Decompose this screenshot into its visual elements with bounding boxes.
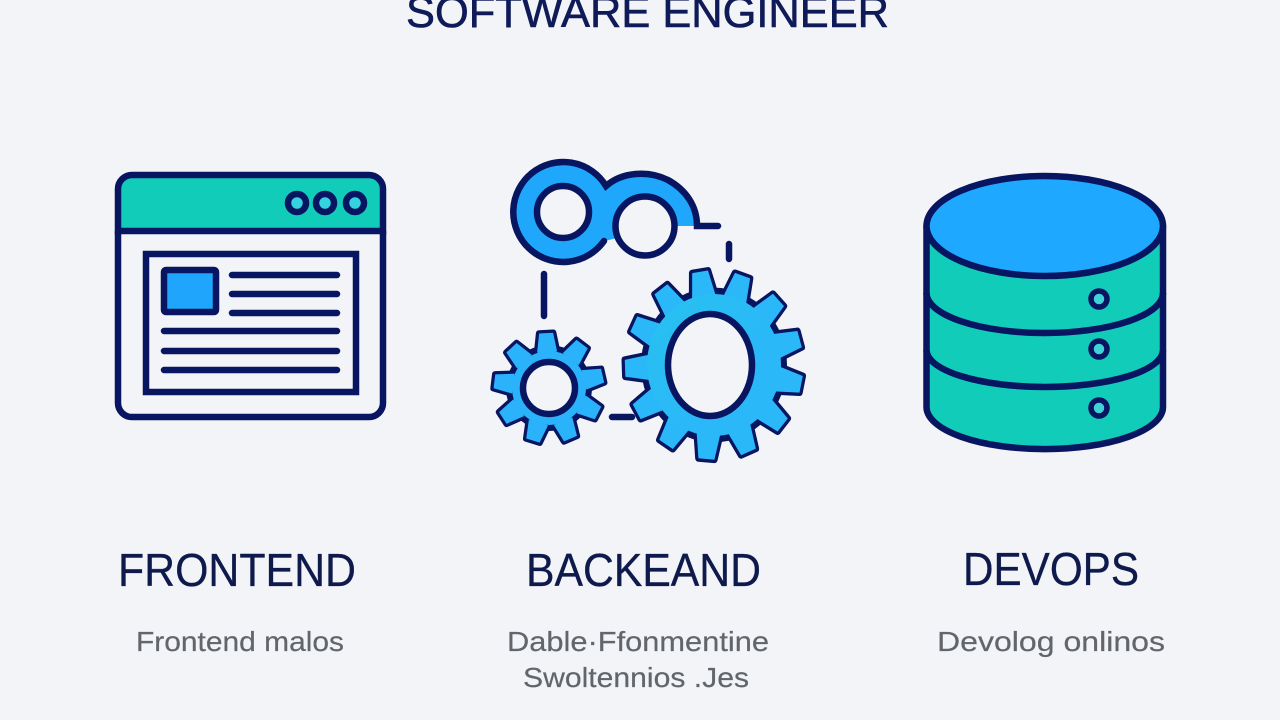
large gear hole xyxy=(668,314,752,416)
panel: devops xyxy=(926,176,1165,657)
heading: frontend: FRONTEND xyxy=(118,544,356,596)
connector dashes xyxy=(544,244,729,417)
large gear xyxy=(625,270,804,460)
panel: frontend xyxy=(118,175,383,657)
small gear xyxy=(493,333,605,444)
text: devops caption: Devolog onlinos xyxy=(937,626,1165,657)
heading: backend: BACKEAND xyxy=(526,544,761,596)
heading: devops: DEVOPS xyxy=(963,543,1139,595)
text: backend caption xyxy=(507,626,769,693)
icon: linked rings and gears xyxy=(493,162,804,460)
icon: browser window xyxy=(118,175,383,417)
panel: backend xyxy=(493,162,804,693)
linked rings xyxy=(513,162,718,262)
icon: database cylinder xyxy=(926,176,1163,449)
text: frontend caption: Frontend malos xyxy=(136,626,344,657)
text: backend caption: Swoltennios .Jes xyxy=(523,662,749,693)
text: backend caption: Dable·Ffonmentine xyxy=(507,626,769,657)
